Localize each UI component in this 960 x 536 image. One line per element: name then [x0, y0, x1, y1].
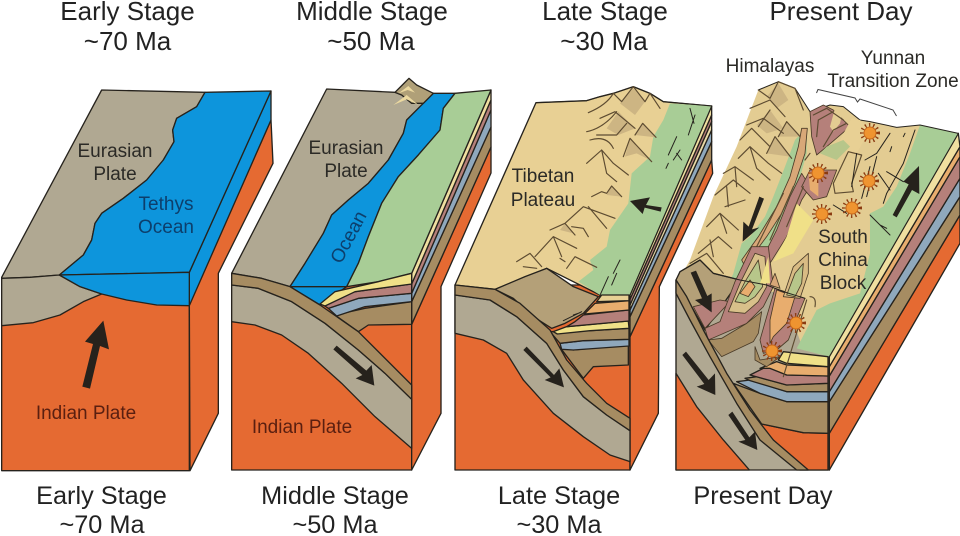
- rigid fault blocks and fault lines: [833, 130, 915, 235]
- label: Tethys Ocean: Tethys: [139, 194, 193, 215]
- label: Himalayas: Himalayas: [726, 56, 814, 77]
- subducting plate: [232, 273, 412, 448]
- arrows: subduction and plate motion: [682, 166, 919, 450]
- Himalayan mountain range: [690, 82, 803, 277]
- label: Eurasian Plate: Eurasian: [308, 138, 384, 159]
- front crust and wedge: [676, 260, 740, 330]
- block diagram: middle stage: [232, 78, 491, 470]
- label: Ocean: Ocean: [327, 208, 372, 267]
- Yunnan fold structures: [742, 105, 870, 267]
- label: South China Block: China: [818, 250, 868, 271]
- subducting plate: [455, 285, 630, 462]
- label: Yunnan Transition Zone: Transition Zone: [827, 71, 959, 92]
- icon: earthquake burst 2: [810, 166, 826, 180]
- icon: earthquake burst 7: [764, 344, 780, 358]
- heading: middle stage top: ~50 Ma: [327, 26, 415, 56]
- caption: present day bottom: Present Day: [693, 482, 833, 510]
- folded strata on front face: [705, 247, 815, 377]
- icon: earthquake burst 1: [862, 126, 878, 140]
- heading: early stage top: ~70 Ma: [84, 26, 172, 56]
- label: Indian Plate: Indian Plate: [36, 403, 136, 424]
- icon: earthquake burst 6: [788, 316, 804, 330]
- icon: earthquake burst 5: [814, 206, 830, 222]
- label: Eurasian Plate: Plate: [324, 161, 368, 182]
- panel: present day block: [676, 48, 960, 470]
- caption: middle stage bottom: Middle Stage: [261, 482, 409, 510]
- icon: earthquake burst 3: [862, 174, 876, 188]
- layered sediments: [550, 295, 629, 378]
- mountain range: [517, 87, 695, 297]
- block diagram: present day: [676, 82, 960, 470]
- block diagram: late stage: [455, 87, 713, 470]
- label: Eurasian Plate: Plate: [93, 164, 137, 185]
- front mountain: [495, 268, 598, 328]
- subducting plate: [676, 280, 808, 470]
- panel: middle stage block: [232, 78, 491, 470]
- heading: late stage top: ~30 Ma: [560, 26, 648, 56]
- top surface: [676, 82, 958, 357]
- label: Eurasian Plate: Eurasian: [78, 141, 152, 162]
- caption: early stage bottom: Early Stage: [36, 482, 167, 510]
- label: Tibetan Plateau: Tibetan: [512, 166, 574, 187]
- layered sediments: [320, 273, 412, 332]
- label: Yunnan Transition Zone: Yunnan: [861, 48, 925, 69]
- arrow: subduction direction: [523, 347, 564, 387]
- arrow: subduction direction: [333, 346, 374, 386]
- label: Indian Plate: Indian Plate: [252, 417, 352, 438]
- label: South China Block: South: [818, 227, 868, 248]
- arrow: Indian Plate moving north: [82, 321, 109, 389]
- label: Tethys Ocean: Ocean: [138, 217, 194, 238]
- arrow: plate convergence westward: [630, 197, 662, 214]
- caption: late stage bottom: Late Stage: [498, 482, 620, 510]
- icon: earthquake burst 4: [844, 200, 860, 216]
- front face layers: [733, 352, 828, 470]
- bracket: Yunnan Transition Zone extent: [816, 90, 896, 116]
- label: Tibetan Plateau: Plateau: [511, 190, 575, 211]
- panel: early stage block: [2, 90, 273, 471]
- mountain: [393, 78, 433, 105]
- block diagram: early stage: [2, 90, 273, 471]
- label: South China Block: Block: [820, 273, 867, 294]
- panel: late stage block: [455, 87, 713, 470]
